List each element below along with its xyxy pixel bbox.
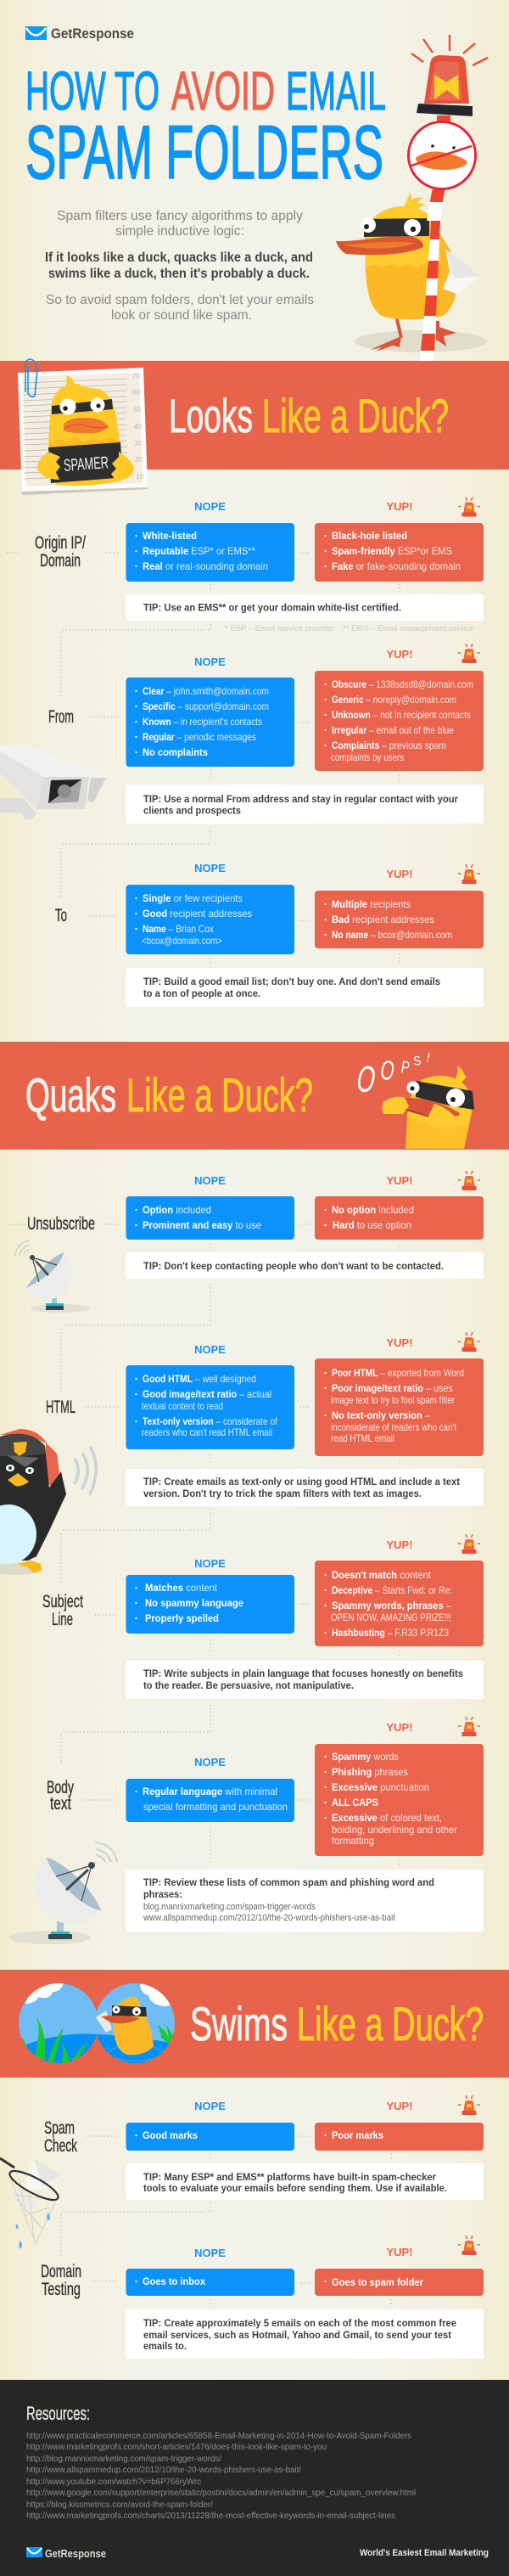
panel: unsubscribe nope: Prominent and easy to use bbox=[143, 1219, 261, 1231]
illustration: net catching envelope bbox=[0, 2158, 62, 2248]
panel: from nope: Regular – periodic messages bbox=[143, 731, 256, 743]
tagline: World's Easiest Email Marketing bbox=[360, 2548, 489, 2558]
panel: body yup: Phishing phrases bbox=[332, 1766, 408, 1778]
NOPE heading: NOPE bbox=[194, 1343, 226, 1356]
tip: origin bbox=[126, 594, 484, 621]
banner: Looks Like a Duck: Looks bbox=[169, 389, 253, 442]
row: Domain Testing bbox=[41, 2236, 484, 2359]
oops lettering: ! bbox=[425, 1050, 431, 1066]
row: Origin IP / Domain bbox=[7, 498, 484, 633]
label: Body text bbox=[47, 1778, 74, 1814]
intro text: Spam filters use fancy algorithms to apply bbox=[57, 209, 303, 223]
panel: subject yup: Spammy words, phrases – bbox=[332, 1600, 451, 1611]
panel: body yup bbox=[315, 1744, 484, 1856]
panel: html yup: inconsiderate of readers who can't bbox=[331, 1421, 457, 1433]
NOPE heading: NOPE bbox=[194, 1756, 226, 1769]
icon: alarm siren bbox=[458, 1717, 480, 1736]
panel: from yup: complaints by users bbox=[331, 751, 404, 763]
polaroid: spamer mugshot duck: SPAMER bbox=[63, 453, 109, 475]
tip: domain: email services, such as Hotmail, Yahoo and Gmail, to send your test bbox=[143, 2329, 451, 2341]
panel: html nope bbox=[126, 1365, 294, 1449]
polaroid: spamer mugshot duck: 20 bbox=[134, 456, 143, 464]
label: Domain Testing: Domain bbox=[41, 2262, 81, 2281]
NOPE heading: NOPE bbox=[194, 655, 226, 668]
panel: to yup: Multiple recipients bbox=[332, 898, 411, 910]
polaroid: spamer mugshot duck bbox=[18, 359, 148, 495]
panel: body yup: Excessive of colored text, bbox=[332, 1812, 442, 1824]
tip: domain bbox=[126, 2309, 484, 2359]
intro text: simple inductive logic: bbox=[115, 224, 244, 239]
tip: spam check: tools to evaluate your emails before sending them. Use if available. bbox=[143, 2182, 447, 2194]
polaroid: spamer mugshot duck: 30 bbox=[134, 440, 142, 447]
panel: origin nope: Reputable ESP* or EMS** bbox=[143, 545, 255, 557]
panel: subject yup: Doesn't match content bbox=[332, 1569, 432, 1581]
panel: to nope: <bcox@domain.com> bbox=[142, 935, 222, 947]
banner: Looks Like a Duck bbox=[0, 361, 509, 470]
panel: spam check nope: Good marks bbox=[143, 2129, 198, 2141]
label: Subject Line: Line bbox=[52, 1610, 73, 1629]
panel: spam check yup: Poor marks bbox=[332, 2129, 383, 2141]
panel: origin yup: Spam-friendly ESP*or EMS bbox=[332, 545, 452, 557]
YUP heading: YUP! bbox=[386, 1336, 413, 1349]
footnote: ** EMS – Email management service bbox=[343, 624, 474, 633]
panel: domain nope: Goes to inbox bbox=[143, 2275, 205, 2287]
tip: html bbox=[126, 1469, 484, 1506]
panel: subject yup: Deceptive – Starts Fwd: or Re: bbox=[332, 1584, 452, 1596]
panel: from nope: Known – in recipient's contacts bbox=[143, 716, 262, 728]
resources list: http://www.marketingprofs.com/short-articles/1476/does-this-look-like-spam-to-you bbox=[26, 2442, 327, 2452]
tip: body: www.allspammedup.com/2012/10/the-20-words-phishers-use-as-bait bbox=[143, 1913, 395, 1923]
icon: alarm siren bbox=[458, 498, 480, 516]
icon: alarm siren bbox=[458, 1171, 480, 1190]
title: EMAIL bbox=[286, 60, 386, 121]
panel: spam check nope bbox=[126, 2123, 294, 2151]
tip: subject: to the reader. Be persuasive, not manipulative. bbox=[143, 1679, 354, 1691]
row: Subject Line bbox=[42, 1534, 484, 1699]
tip: unsubscribe: TIP: Don't keep contacting people who don't want to be contacted. bbox=[143, 1260, 444, 1272]
label: Domain Testing bbox=[41, 2262, 81, 2299]
banner: Quaks Like a Duck bbox=[0, 1042, 509, 1150]
label: Origin IP/Domain bbox=[35, 533, 86, 571]
title: AVOID bbox=[171, 60, 275, 121]
panel: body yup: bolding, underlining and other bbox=[332, 1824, 457, 1836]
tip: to: to a ton of people at once. bbox=[143, 987, 260, 999]
resources list: http://www.youtube.com/watch?v=b6P766ryWrc bbox=[26, 2477, 201, 2487]
intro text bbox=[45, 209, 314, 323]
icon: alarm siren bbox=[458, 1332, 480, 1352]
row: Body text bbox=[47, 1717, 484, 1932]
label: From: From bbox=[48, 707, 74, 727]
polaroid: spamer mugshot duck: 40 bbox=[134, 423, 142, 430]
resources list: http://www.allspammedup.com/2012/10/the-20-words-phishers-use-as-bait/ bbox=[26, 2465, 301, 2475]
panel: to nope: Good recipient addresses bbox=[143, 908, 252, 920]
panel: from yup: Generic – noreply@domain.com bbox=[332, 694, 456, 706]
tip: unsubscribe bbox=[126, 1252, 484, 1279]
heading: Resources: Resources: bbox=[26, 2403, 90, 2424]
polaroid: spamer mugshot duck: 50 bbox=[133, 406, 141, 413]
panel: subject nope: No spammy language bbox=[145, 1597, 243, 1609]
NOPE heading: NOPE bbox=[194, 862, 226, 875]
panel: to yup: No name – bcox@domain.com bbox=[332, 929, 452, 941]
illustration: small satellite dish bbox=[15, 1240, 90, 1313]
logo: GetResponse footer bbox=[26, 2547, 106, 2560]
intro text: If it looks like a duck, quacks like a duck, and bbox=[45, 250, 313, 265]
intro text: swims like a duck, then it's probably a duck. bbox=[48, 267, 310, 281]
row: Spam Check bbox=[44, 2095, 484, 2200]
banner: Swims Like a Duck: Swims bbox=[190, 1997, 288, 2050]
tip: domain: emails to. bbox=[143, 2340, 187, 2352]
panel: html nope: Good HTML – well designed bbox=[143, 1373, 256, 1385]
panel: from yup bbox=[315, 671, 484, 771]
tip: body: phrases: bbox=[143, 1888, 182, 1900]
NOPE heading: NOPE bbox=[194, 500, 226, 513]
panel: origin yup bbox=[315, 523, 484, 582]
panel: body nope: special formatting and punctuation bbox=[143, 1801, 288, 1813]
panel: unsubscribe nope: Option included bbox=[143, 1204, 211, 1216]
panel: body nope: Regular language with minimal bbox=[143, 1786, 277, 1797]
tip: to bbox=[126, 968, 484, 1007]
panel: unsubscribe yup: No option included bbox=[332, 1204, 414, 1216]
panel: body nope bbox=[126, 1779, 294, 1822]
row: Unsubscribe bbox=[9, 1171, 484, 1279]
row: HTML bbox=[46, 1332, 484, 1506]
footnote: * ESP – Email service provider bbox=[225, 624, 334, 633]
illustration: binocular view of swimming duck bbox=[19, 1983, 175, 2063]
intro text: look or sound like spam. bbox=[111, 308, 252, 323]
tip: spam check bbox=[126, 2163, 484, 2200]
illustration: large satellite dish bbox=[9, 1842, 117, 1944]
label: Body text: Body bbox=[47, 1778, 74, 1797]
panel: subject yup bbox=[315, 1561, 484, 1646]
icon: alarm siren bbox=[458, 864, 480, 884]
oops lettering: S bbox=[412, 1054, 422, 1069]
oops lettering: O bbox=[378, 1054, 397, 1087]
YUP heading: YUP! bbox=[386, 648, 413, 661]
panel: html yup: image text to try to fool spam filter bbox=[331, 1394, 455, 1406]
logo: GetResponse header: GetResponse bbox=[51, 25, 134, 42]
icon: alarm siren bbox=[458, 2095, 480, 2115]
tip: body: blog.mannixmarketing.com/spam-trigger-words bbox=[143, 1902, 316, 1912]
tip: subject: TIP: Write subjects in plain language that focuses honestly on benefits bbox=[143, 1668, 463, 1679]
tip: html: TIP: Create emails as text-only or using good HTML and include a text bbox=[143, 1476, 460, 1488]
tip: domain: TIP: Create approximately 5 emails on each of the most common free bbox=[143, 2317, 456, 2329]
panel: origin yup: Black-hole listed bbox=[332, 530, 407, 542]
panel: unsubscribe yup bbox=[315, 1196, 484, 1240]
panel: to nope bbox=[126, 885, 294, 954]
footnote bbox=[225, 624, 474, 633]
panel: to yup: Bad recipient addresses bbox=[332, 914, 434, 925]
intro text: So to avoid spam folders, don't let your emails bbox=[46, 293, 314, 307]
tip: to: TIP: Build a good email list; don't buy one. And don't send emails bbox=[143, 976, 440, 987]
panel: unsubscribe yup: Hard to use option bbox=[333, 1219, 411, 1231]
oops lettering: P bbox=[400, 1058, 411, 1077]
resources list: http://blog.mannixmarketing.com/spam-trigger-words/ bbox=[26, 2454, 221, 2464]
tip: html: version. Don't try to trick the spam filters with text as images. bbox=[143, 1488, 422, 1499]
panel: body yup: formatting bbox=[332, 1835, 374, 1847]
panel: from nope bbox=[126, 678, 294, 767]
NOPE heading: NOPE bbox=[194, 2247, 226, 2259]
illustration: duck covering its beak bbox=[382, 1066, 474, 1149]
panel: from nope: Clear – john.smith@domain.com bbox=[143, 685, 269, 697]
panel: origin nope: Real or real-sounding domain bbox=[143, 560, 268, 572]
panel: origin nope: White-listed bbox=[143, 530, 197, 542]
label: Origin IP/Domain: Domain bbox=[40, 551, 81, 571]
panel: spam check yup bbox=[315, 2123, 484, 2151]
title bbox=[25, 60, 386, 194]
panel: from yup: Unknown – not in recipient contacts bbox=[332, 709, 471, 721]
polaroid: spamer mugshot duck: 10 bbox=[136, 473, 143, 481]
illustration: masked duck with siren pole bbox=[336, 35, 488, 361]
tip: subject bbox=[126, 1661, 484, 1699]
icon: alarm siren bbox=[458, 1534, 480, 1554]
label: Spam Check bbox=[44, 2118, 77, 2156]
polaroid: spamer mugshot duck: 60 bbox=[132, 389, 140, 397]
label: Domain Testing: Testing bbox=[42, 2280, 81, 2299]
YUP heading: YUP! bbox=[386, 868, 413, 880]
panel: from yup: Obscure – 1338sdsd8@domain.com bbox=[332, 678, 473, 690]
YUP heading: YUP! bbox=[386, 500, 413, 513]
panel: body yup: Spammy words bbox=[332, 1751, 399, 1763]
YUP heading: YUP! bbox=[386, 1721, 413, 1734]
label: Origin IP/Domain: Origin IP/ bbox=[35, 533, 86, 553]
panel: html nope: Good image/text ratio – actual bbox=[143, 1388, 271, 1400]
panel: from yup: Irregular – email out of the blue bbox=[332, 724, 454, 736]
tip: spam check: TIP: Many ESP* and EMS** platforms have built-in spam-checker bbox=[143, 2171, 436, 2183]
panel: subject nope: Matches content bbox=[145, 1582, 218, 1594]
tip: from: TIP: Use a normal From address and stay in regular contact with your bbox=[143, 793, 458, 805]
row: From bbox=[48, 644, 484, 824]
panel: html yup: No text-only version – bbox=[332, 1409, 430, 1421]
panel: html nope: readers who can't read HTML email bbox=[142, 1426, 272, 1438]
tip: body: TIP: Review these lists of common spam and phishing word and bbox=[143, 1876, 434, 1888]
panel: origin yup: Fake or fake-sounding domain bbox=[332, 560, 461, 572]
panel: domain yup bbox=[315, 2269, 484, 2296]
icon: alarm siren bbox=[458, 2236, 480, 2255]
resources list: http://www.google.com/support/enterprise/static/postini/docs/admin/en/admin_spe_cu/spam_overview.html bbox=[26, 2488, 416, 2498]
YUP heading: YUP! bbox=[386, 1174, 413, 1187]
banner: Swims Like a Duck bbox=[0, 1970, 509, 2078]
panel: to nope: Name – Brian Cox bbox=[143, 923, 214, 935]
panel: body yup: Excessive punctuation bbox=[332, 1781, 429, 1793]
panel: subject nope: Properly spelled bbox=[145, 1612, 219, 1624]
logo: GetResponse footer: GetResponse bbox=[45, 2547, 106, 2560]
illustration: security camera bbox=[0, 745, 106, 819]
panel: to yup bbox=[315, 891, 484, 948]
tip: from: clients and prospects bbox=[143, 805, 241, 817]
NOPE heading: NOPE bbox=[194, 2100, 226, 2112]
label: Subject Line: Subject bbox=[42, 1592, 83, 1611]
panel: domain nope bbox=[126, 2269, 294, 2296]
panel: from nope: No complaints bbox=[143, 746, 208, 758]
label: To: To bbox=[55, 906, 67, 925]
label: HTML: HTML bbox=[46, 1398, 76, 1417]
oops lettering: O bbox=[353, 1057, 380, 1102]
oops lettering bbox=[353, 1050, 431, 1102]
label: Spam Check: Spam bbox=[44, 2118, 75, 2138]
panel: html yup: Poor image/text ratio – uses bbox=[332, 1382, 453, 1394]
panel: from nope: Specific – support@domain.com bbox=[143, 700, 269, 712]
label: Unsubscribe: Unsubscribe bbox=[27, 1214, 95, 1234]
label: Body text: text bbox=[50, 1794, 71, 1814]
banner: Quaks Like a Duck: Quaks bbox=[25, 1068, 116, 1122]
label: Subject Line bbox=[42, 1592, 83, 1629]
panel: origin nope bbox=[126, 523, 294, 582]
panel: subject yup: OPEN NOW, AMAZING PRIZE!!! bbox=[331, 1611, 451, 1623]
title: HOW TO bbox=[25, 60, 159, 121]
tip: body bbox=[126, 1870, 484, 1932]
YUP heading: YUP! bbox=[386, 2246, 413, 2258]
panel: body yup: ALL CAPS bbox=[332, 1797, 378, 1808]
illustration: penguin with headphones bbox=[0, 1429, 96, 1575]
NOPE heading: NOPE bbox=[194, 1174, 226, 1187]
panel: subject nope bbox=[126, 1575, 294, 1634]
panel: html yup: read HTML email bbox=[331, 1432, 394, 1444]
NOPE heading: NOPE bbox=[194, 1557, 226, 1570]
YUP heading: YUP! bbox=[386, 1538, 413, 1551]
panel: subject yup: Hashbusting – F.R33 P.R1Z3 bbox=[332, 1627, 449, 1639]
row: To bbox=[55, 862, 484, 1007]
YUP heading: YUP! bbox=[386, 2100, 413, 2112]
panel: html yup bbox=[315, 1358, 484, 1456]
resources list: http://www.practicalecommerce.com/articles/65858-Email-Marketing-in-2014-How-to-Avoid-Spam-Folders bbox=[26, 2431, 411, 2441]
label: Spam Check: Check bbox=[44, 2136, 77, 2156]
resources list: https://blog.kissmetrics.com/avoid-the-spam-folder/ bbox=[26, 2500, 213, 2510]
footer panel bbox=[0, 2380, 509, 2576]
panel: html nope: textual content to read bbox=[142, 1400, 223, 1412]
panel: html nope: Text-only version – considerate of bbox=[143, 1415, 278, 1427]
polaroid: spamer mugshot duck: 70 bbox=[132, 373, 140, 380]
panel: domain yup: Goes to spam folder bbox=[332, 2276, 423, 2288]
tip: origin: TIP: Use an EMS** or get your domain white-list certified. bbox=[143, 601, 401, 613]
panel: unsubscribe nope bbox=[126, 1196, 294, 1240]
resources list bbox=[26, 2431, 416, 2521]
tip: from bbox=[126, 785, 484, 824]
panel: to nope: Single or few recipients bbox=[143, 892, 243, 904]
icon: alarm siren bbox=[458, 644, 480, 663]
panel: from yup: Complaints – previous spam bbox=[332, 740, 446, 751]
panel: html yup: Poor HTML – exported from Word bbox=[332, 1367, 464, 1379]
resources list: http://www.marketingprofs.com/charts/2013/11228/the-most-effective-keywords-in-email-subject-lines bbox=[26, 2511, 395, 2521]
banner: Quaks Like a Duck: Like a Duck? bbox=[126, 1068, 313, 1122]
